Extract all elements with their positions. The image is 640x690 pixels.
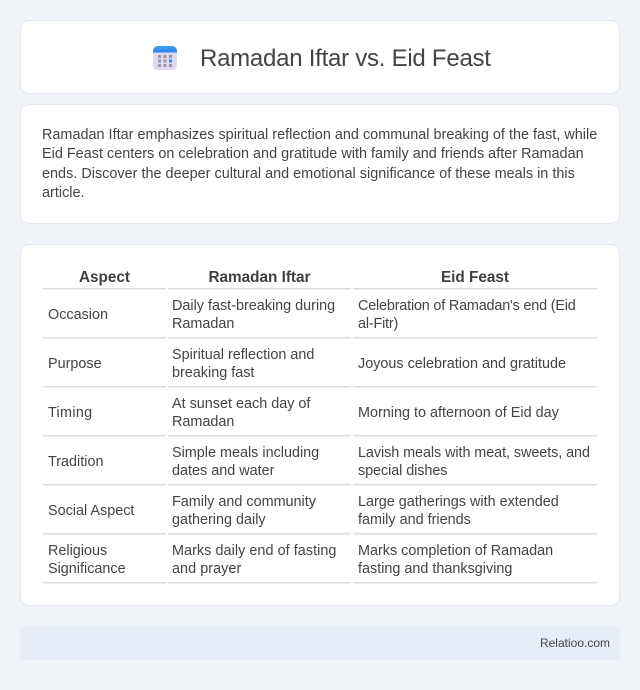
table header: Eid Feast [441,269,509,286]
row: Occasion: al-Fitr) [358,316,398,332]
row: Religious Significance: Significance [48,561,126,577]
panel: comparison table [20,244,620,606]
table header [79,269,509,286]
row: Tradition: Simple meals including [172,445,319,461]
panel: title card [20,20,620,94]
row: Social Aspect: Social Aspect [48,503,134,519]
row: Purpose: breaking fast [172,365,254,381]
title: Ramadan Iftar vs. Eid Feast [200,45,491,72]
comparison table [43,269,597,584]
icon: calendar [153,46,177,70]
row: Religious Significance: Marks daily end of fasting [172,543,336,559]
row: Purpose: Joyous celebration and gratitude [358,356,566,372]
row: Occasion: Ramadan [172,316,234,332]
row: Tradition: Lavish meals with meat, sweets, and [358,445,590,461]
row: Tradition: Tradition [48,454,103,470]
row: Timing: Timing [48,405,92,421]
text block: introduction: Eid Feast centers on celebration and gratitude with family and friends after Ramadan [42,146,584,162]
row: Tradition [48,445,590,479]
row: Social Aspect: Large gatherings with extended [358,494,559,510]
row: Purpose: Spiritual reflection and [172,347,314,363]
footer text: Relatioo.com [540,636,610,650]
text block: introduction [42,127,597,201]
row: Occasion: Daily fast-breaking during [172,298,335,314]
row: Timing: Ramadan [172,414,234,430]
row: Social Aspect [48,494,559,528]
row: Purpose: Purpose [48,356,102,372]
row: Purpose [48,347,566,381]
row: Timing [48,396,559,430]
row: Religious Significance: fasting and thanksgiving [358,561,512,577]
row: Occasion: Occasion [48,307,108,323]
text block: introduction: ends. Discover the deeper cultural and emotional significance of these meals in this [42,166,575,182]
footer bar [20,626,620,660]
table header: Ramadan Iftar [208,269,310,286]
row: Religious Significance [48,543,553,577]
text block: introduction: article. [42,185,85,201]
row: Tradition: special dishes [358,463,447,479]
row: Timing: Morning to afternoon of Eid day [358,405,559,421]
row: Religious Significance: Religious [48,543,107,559]
row: Social Aspect: family and friends [358,512,471,528]
row: Occasion: Celebration of Ramadan's end (Eid [358,298,576,314]
panel: introduction [20,104,620,224]
row: Occasion [48,298,576,332]
row: Religious Significance: and prayer [172,561,241,577]
row: Social Aspect: gathering daily [172,512,266,528]
row: Timing: At sunset each day of [172,396,310,412]
row: Social Aspect: Family and community [172,494,316,510]
table header: Aspect [79,269,130,286]
text block: introduction: Ramadan Iftar emphasizes spiritual reflection and communal breaking of the fast, while [42,127,597,143]
row: Religious Significance: Marks completion of Ramadan [358,543,553,559]
row: Tradition: dates and water [172,463,274,479]
